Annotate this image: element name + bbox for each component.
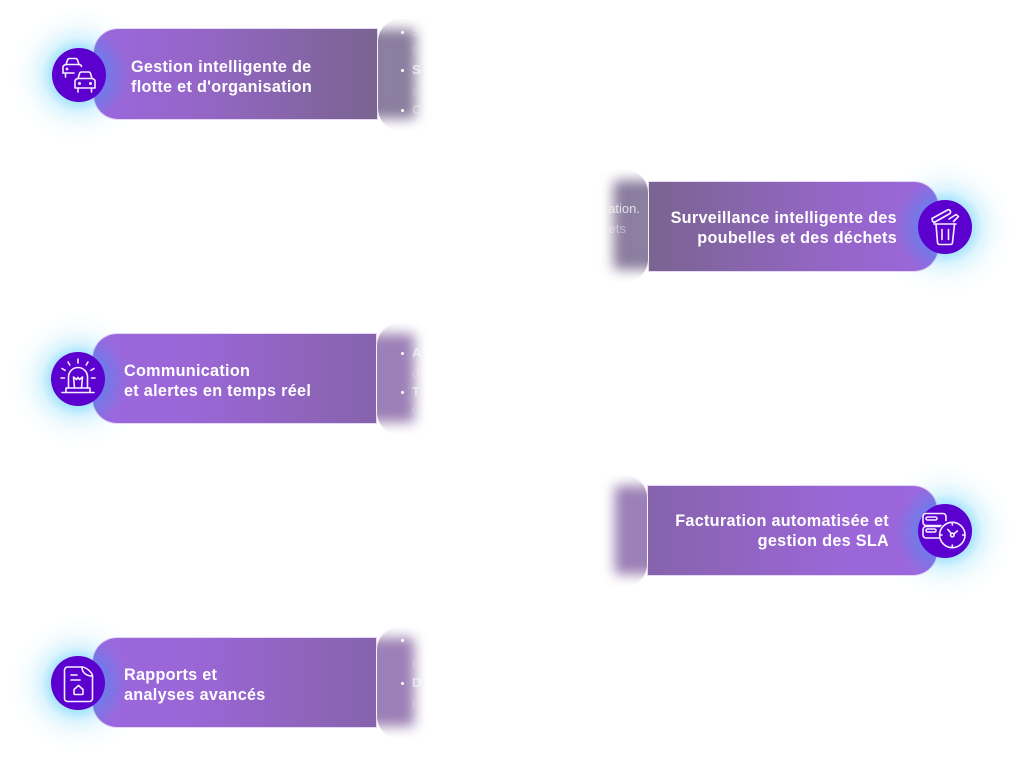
icon glow: [3, 609, 153, 759]
card title: Gestion intelligente de: [131, 58, 312, 76]
icon: trash bin: [918, 200, 972, 254]
detail panel, blurred: d: [412, 365, 419, 380]
card background: [648, 486, 937, 575]
card title: Rapports et: [124, 666, 217, 684]
detail panel, blurred: e: [412, 42, 419, 57]
card title: Facturation automatisée et: [675, 512, 889, 530]
panel: communication et alertes: [25, 324, 424, 432]
card background: [649, 182, 938, 271]
detail panel, blurred: r: [412, 655, 416, 670]
card title: flotte et d'organisation: [131, 78, 312, 96]
detail panel, blurred: A: [412, 345, 421, 360]
card title: Communication: [124, 362, 250, 380]
card title: analyses avancés: [124, 686, 266, 704]
icon: two cars: [52, 48, 106, 102]
icon: alert beacon: [51, 352, 105, 406]
icon glow: [4, 0, 154, 150]
detail panel, blurred: [606, 476, 648, 584]
detail panel, blurred: D: [412, 675, 421, 690]
detail panel, blurred: S: [412, 24, 421, 39]
card title: [131, 58, 312, 96]
glow over card: [877, 486, 937, 575]
detail panel, blurred: T: [412, 384, 420, 399]
detail panel, blurred: C: [412, 102, 421, 117]
card title: [675, 512, 889, 550]
card background: [93, 334, 376, 423]
detail panel, blurred: ets: [609, 221, 626, 236]
icon glow: [870, 152, 1020, 302]
icon: servers and clock: [918, 504, 972, 558]
glow over card: [878, 182, 938, 271]
panel: rapports et analyses: [25, 628, 424, 736]
glow over card: [94, 29, 154, 119]
card title: [124, 362, 311, 400]
detail panel, blurred: T: [412, 632, 420, 647]
panel: facturation et SLA: [606, 476, 998, 584]
icon: report document: [51, 656, 105, 710]
card title: [124, 666, 266, 704]
card title: et alertes en temps réel: [124, 382, 311, 400]
card title: [671, 209, 897, 247]
detail panel, blurred: [376, 628, 424, 736]
detail panel, blurred: ation.: [608, 201, 640, 216]
panel: surveillance des poubelles: [604, 171, 998, 280]
glow over card: [93, 638, 153, 727]
detail panel, blurred: S: [412, 62, 421, 77]
icon glow: [870, 456, 1020, 606]
detail panel, blurred: [376, 324, 424, 432]
icon glow: [3, 305, 153, 455]
panel: gestion de flotte: [26, 20, 424, 128]
card background: [93, 638, 376, 727]
detail panel, blurred: e: [412, 84, 419, 99]
card title: Surveillance intelligente des: [671, 209, 897, 227]
card background: [94, 29, 377, 119]
card title: poubelles et des déchets: [697, 229, 897, 247]
detail panel, blurred: l: [412, 697, 415, 712]
detail panel, blurred: [377, 20, 424, 128]
glow over card: [93, 334, 153, 423]
card title: gestion des SLA: [758, 532, 889, 550]
detail panel, blurred: o: [412, 402, 419, 417]
detail panel, blurred: [604, 171, 649, 279]
